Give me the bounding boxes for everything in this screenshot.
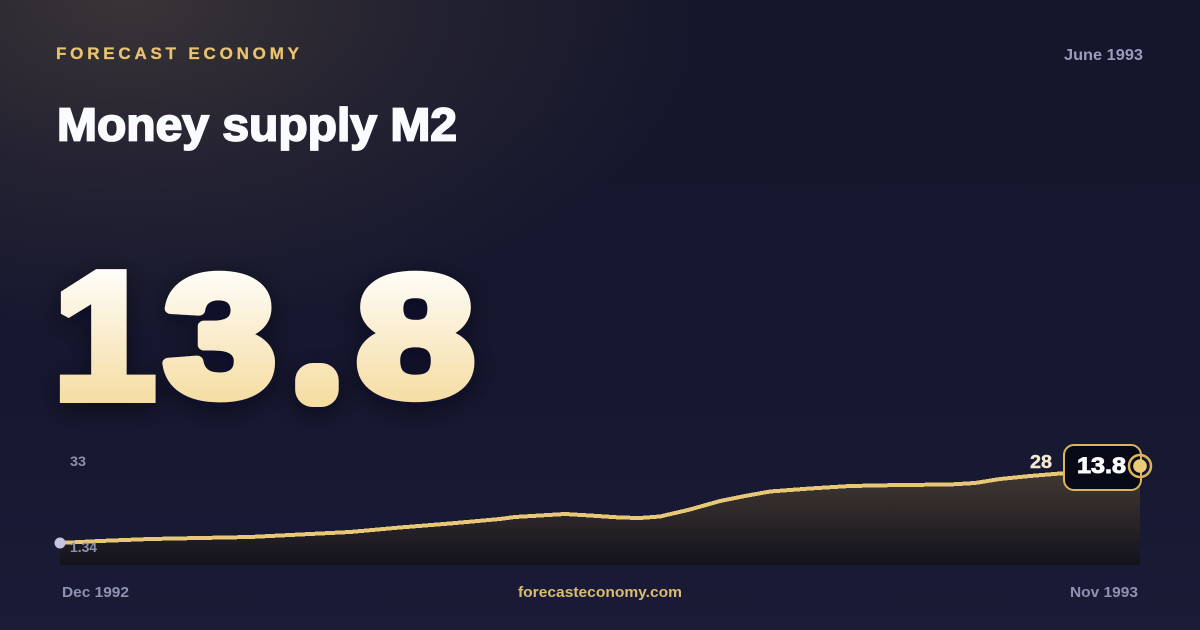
brand label: FORECAST ECONOMY (56, 44, 300, 63)
big value: 3 (164, 242, 276, 432)
title: Money supply M2 (57, 98, 457, 150)
value callout (1064, 445, 1141, 490)
big value: 1 (53, 235, 156, 437)
axis max: 33 (70, 454, 87, 469)
value callout: 13.8 (1077, 453, 1126, 478)
axis min: 1.34 (70, 540, 97, 555)
area fill (60, 466, 1140, 565)
end date: Nov 1993 (1070, 585, 1138, 601)
end marker (1129, 455, 1151, 477)
start date: Dec 1992 (62, 585, 129, 601)
start marker (54, 538, 66, 548)
date label: June 1993 (1064, 47, 1143, 64)
previous value label: 28 (1030, 452, 1052, 472)
sparkline chart (54, 445, 1151, 565)
big value (53, 235, 474, 437)
trend line (60, 473, 1066, 543)
website: forecasteconomy.com (518, 585, 682, 601)
big value: . (309, 336, 325, 402)
big value: 8 (357, 241, 474, 431)
